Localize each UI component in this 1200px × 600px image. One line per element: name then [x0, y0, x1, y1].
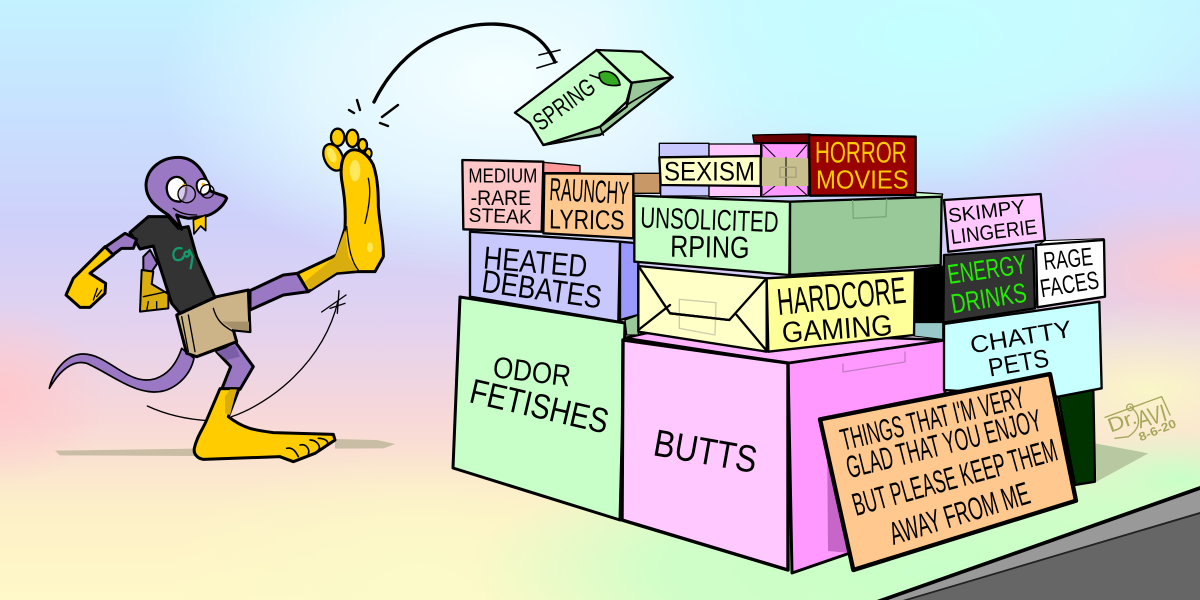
box: chatty pets	[944, 302, 1102, 397]
box: horror movies: MOVIES	[816, 164, 909, 194]
box: odor fetishes: FETISHES	[466, 372, 612, 442]
shirt	[130, 217, 215, 313]
box: unsolicited rping	[634, 192, 943, 275]
sign: things I'm glad you enjoy: THINGS THAT I'M VERY	[837, 380, 1028, 457]
box: skimpy lingerie: SKIMPY	[947, 196, 1026, 228]
box: heated debates	[470, 232, 638, 335]
box: dark green	[1058, 389, 1095, 485]
sign: things I'm glad you enjoy: AWAY FROM ME	[885, 475, 1034, 552]
box: sexism: SEXISM	[664, 157, 755, 187]
box: odor fetishes: ODOR	[491, 351, 573, 393]
standing leg	[194, 342, 335, 462]
box: chatty pets: PETS	[986, 344, 1051, 383]
box: hardcore gaming	[638, 266, 943, 352]
box: rage faces: RAGE	[1042, 243, 1094, 276]
sign: things I'm glad you enjoy	[820, 374, 1076, 570]
box: horror movies	[753, 134, 916, 196]
box: medium-rare steak: -RARE	[471, 186, 531, 210]
tail	[49, 348, 194, 392]
box: medium-rare steak	[462, 160, 580, 232]
signature: Dr.	[1105, 407, 1140, 437]
shadow of the stack	[1095, 443, 1148, 482]
box: skimpy lingerie	[944, 194, 1045, 252]
tail motion lines	[147, 291, 346, 421]
box: raunchy lyrics: RAUNCHY	[549, 171, 630, 211]
box: hardcore gaming: GAMING	[781, 309, 894, 350]
box: rage faces	[1036, 239, 1105, 307]
front arm	[66, 233, 137, 307]
box: energy drinks	[943, 248, 1035, 323]
box: unsolicited rping: UNSOLICITED	[640, 201, 779, 239]
signature: 8-6-20	[1137, 416, 1179, 444]
signature: AVI	[1134, 400, 1170, 434]
boxes on the right side of the stack	[820, 194, 1179, 570]
box: unsolicited rping: RPING	[670, 230, 750, 265]
box: energy drinks: DRINKS	[949, 277, 1029, 319]
head with glasses	[146, 157, 227, 234]
box: raunchy lyrics: LYRICS	[549, 203, 625, 236]
shorts	[177, 290, 250, 357]
box: hardcore gaming: HARDCORE	[775, 269, 908, 323]
back arm	[140, 250, 168, 312]
box: rage faces: FACES	[1038, 266, 1101, 303]
sign: things I'm glad you enjoy: GLAD THAT YOU ENJOY	[843, 403, 1045, 485]
box: chatty pets: CHATTY	[968, 316, 1074, 359]
ground shadow under character	[55, 439, 395, 456]
box: medium-rare steak: STEAK	[468, 205, 533, 229]
box: horror movies: HORROR	[815, 137, 907, 170]
box: medium-rare steak: MEDIUM	[468, 165, 537, 187]
signature	[1105, 397, 1179, 444]
boxes in the upper left and centre of the stack	[462, 50, 943, 352]
box: skimpy lingerie: LINGERIE	[949, 216, 1038, 249]
box stack	[453, 50, 1179, 573]
box: sexism	[659, 143, 808, 197]
box: heated debates: HEATED	[482, 239, 589, 284]
icon: green leaf	[590, 71, 620, 86]
kicking leg and foot	[250, 129, 383, 310]
road at bottom right	[877, 486, 1200, 600]
box: raunchy lyrics	[543, 171, 660, 238]
box: butts: BUTTS	[650, 423, 760, 482]
box: odor fetishes	[453, 297, 625, 520]
motion lines: arc of the kick	[349, 24, 560, 126]
character: purple lizard kicking	[49, 129, 383, 462]
box: heated debates: DEBATES	[480, 263, 604, 315]
box: spring, flying through the air: SPRING	[528, 74, 601, 137]
shirt logo	[173, 248, 193, 268]
box: butts	[622, 330, 945, 573]
box: energy drinks: ENERGY	[946, 248, 1028, 290]
box: spring, flying through the air	[515, 50, 673, 145]
